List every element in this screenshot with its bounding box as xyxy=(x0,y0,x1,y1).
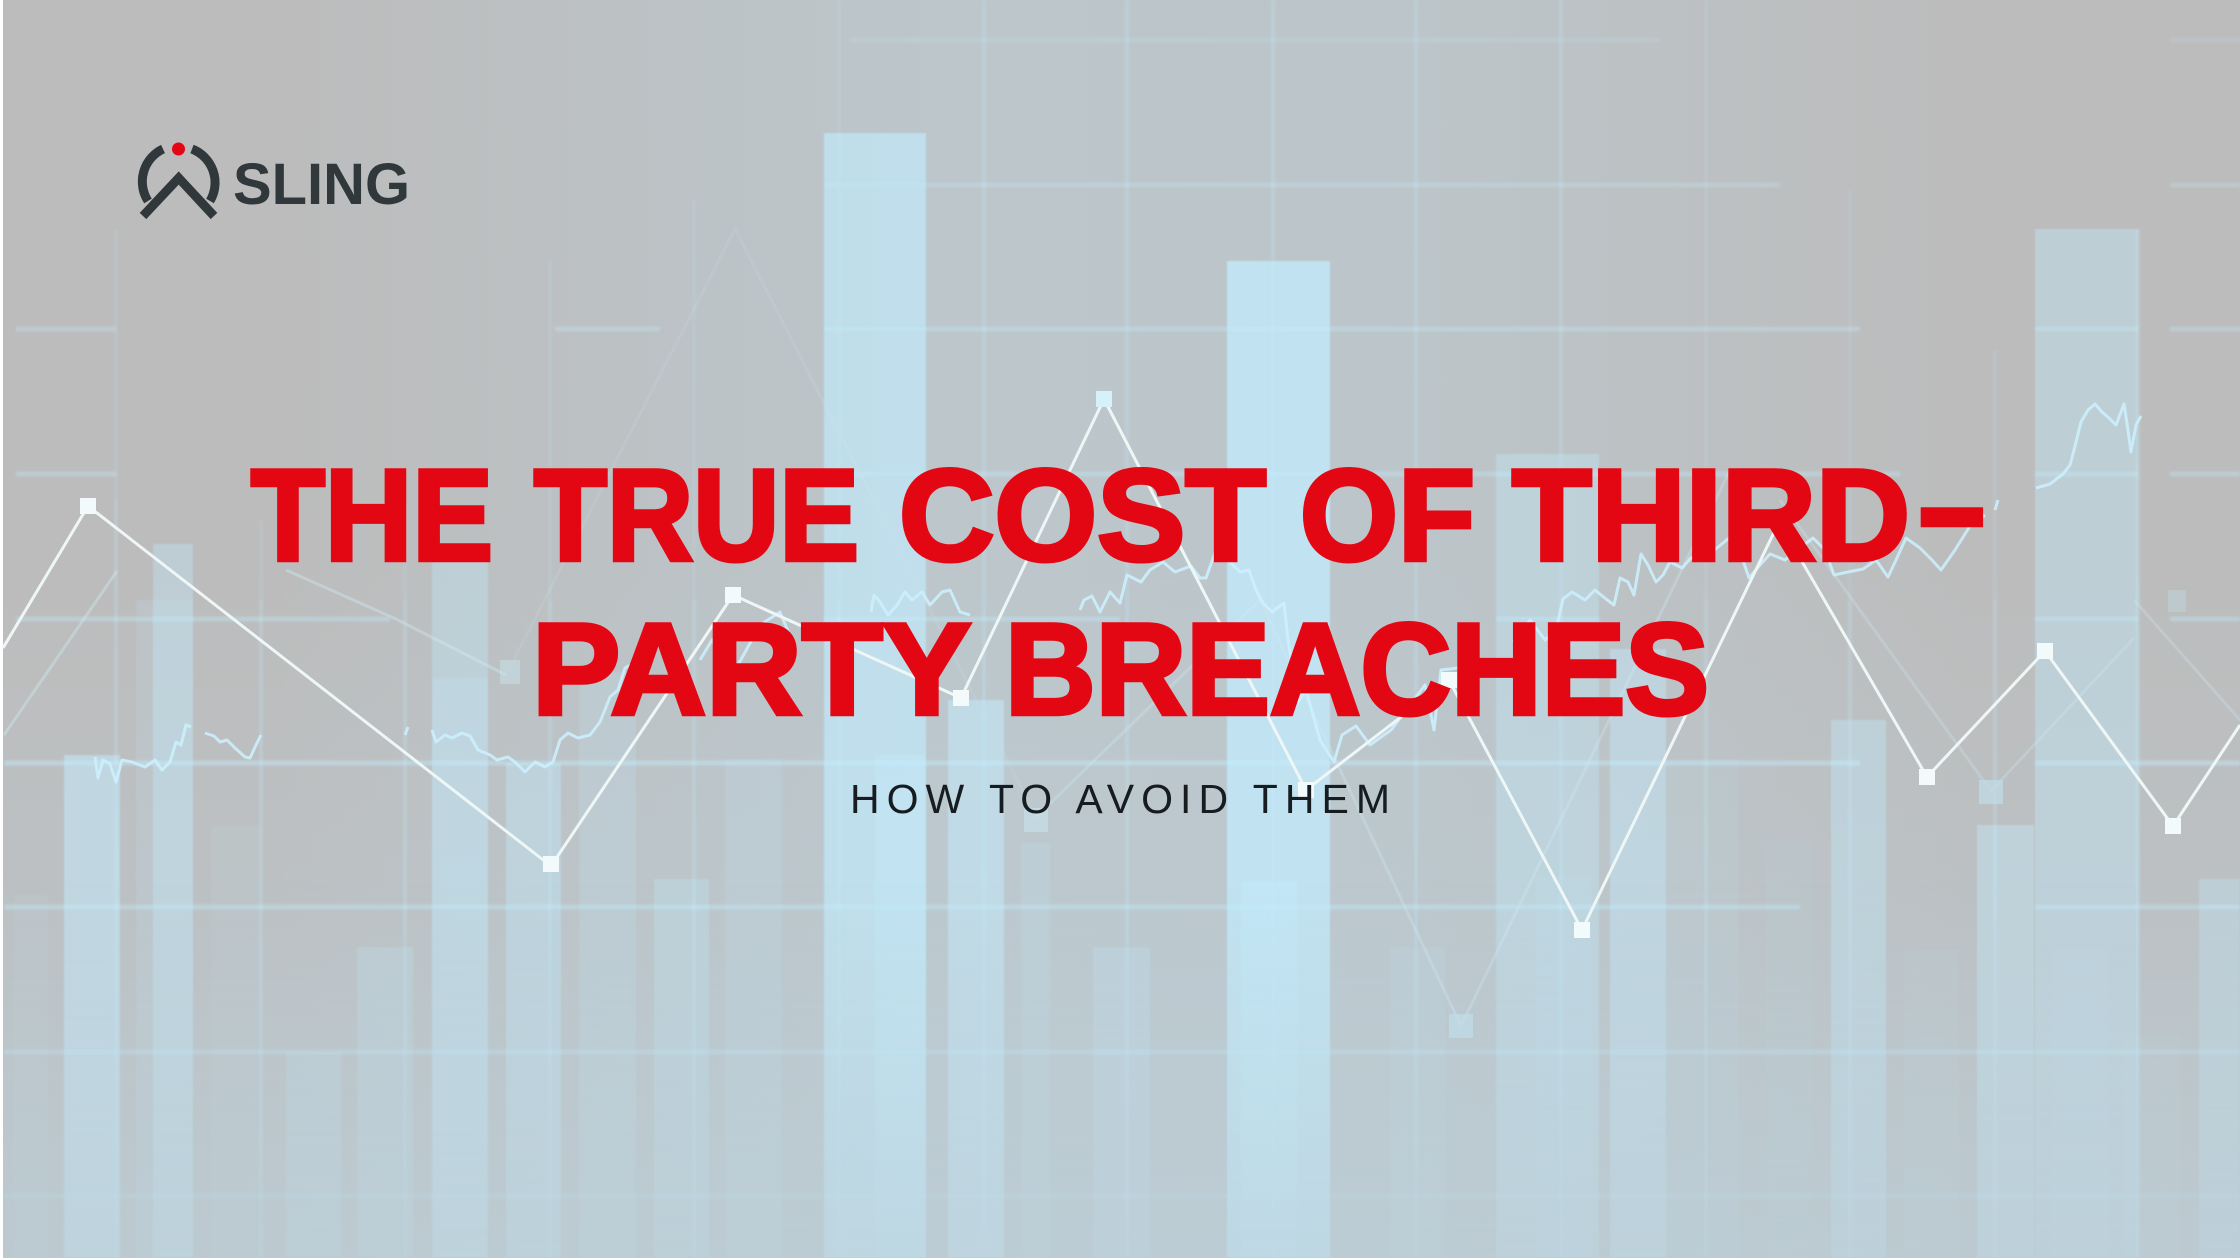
title: BREACHES xyxy=(1005,596,1709,742)
title: THE xyxy=(251,442,493,588)
logo: Sling xyxy=(142,142,410,217)
title: TRUE xyxy=(534,442,859,588)
logo wordmark: SLING xyxy=(233,152,410,217)
title xyxy=(251,433,1988,742)
subtitle: HOW TO AVOID THEM xyxy=(850,776,1390,822)
price line chart xyxy=(95,404,2141,782)
title: COST xyxy=(899,442,1266,588)
title: OF xyxy=(1300,442,1475,588)
white line chart xyxy=(3,391,2240,938)
title: PARTY xyxy=(532,596,971,742)
title: - xyxy=(1916,433,1988,579)
title: THIRD xyxy=(1512,442,1910,588)
logo icon xyxy=(142,142,215,216)
faint line chart xyxy=(4,229,2240,1038)
